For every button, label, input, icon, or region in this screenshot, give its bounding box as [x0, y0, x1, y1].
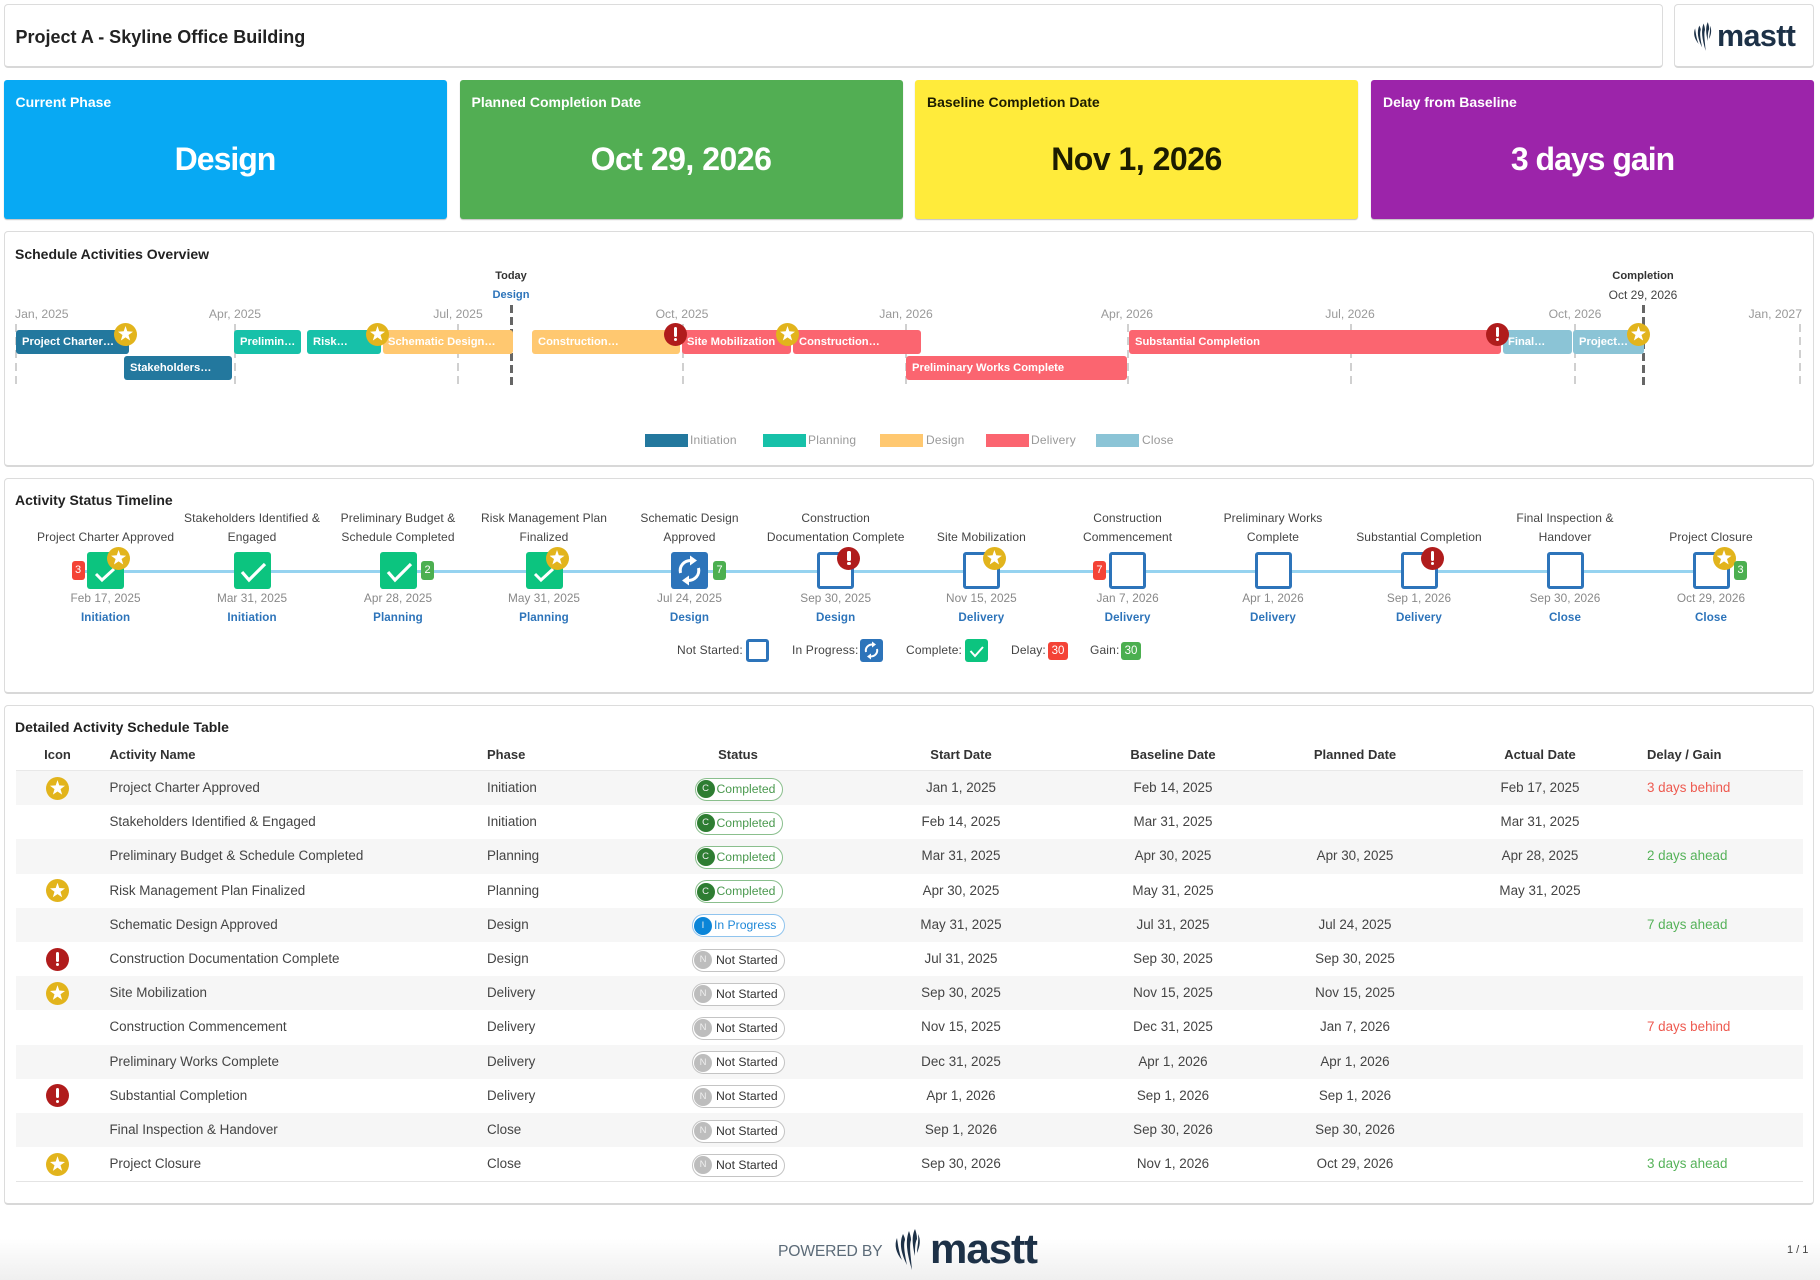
gantt axis labels: Jul, 2025 [433, 307, 483, 321]
row: project charter approved [16, 771, 1803, 805]
row: construction commencement: 7 days behind [1647, 1019, 1730, 1034]
icon: mastt logo [1694, 22, 1712, 51]
milestone: construction commencement [1083, 511, 1172, 624]
row: project closure: Nov 1, 2026 [1137, 1156, 1209, 1171]
footer background [0, 1225, 1820, 1280]
row: project closure: Close [487, 1156, 521, 1171]
row: schematic design: Schematic Design Approved [110, 917, 278, 932]
milestone: final inspection: Close [1549, 611, 1581, 624]
row: final inspection: Final Inspection & Handover [110, 1122, 278, 1137]
status legend: Not Started: [677, 643, 743, 657]
heading: Activity Status Timeline [15, 492, 173, 508]
row: project closure: Project Closure [110, 1156, 201, 1171]
milestone: risk management plan: Finalized [520, 530, 568, 544]
row: preliminary budget: Mar 31, 2025 [922, 848, 1000, 863]
table header: Activity Name [110, 747, 195, 762]
milestone: construction documentation: Sep 30, 2025 [800, 591, 871, 605]
row: site mobilization: Sep 30, 2025 [921, 985, 1001, 1000]
milestone: final inspection: Final Inspection & [1516, 511, 1614, 525]
milestone: substantial completion: Delivery [1396, 611, 1442, 624]
card: delay from baseline: Delay from Baseline [1383, 94, 1517, 110]
row: risk management plan [46, 879, 1581, 903]
milestone: construction commencement: Construction [1093, 511, 1162, 525]
gantt axis labels [15, 307, 1802, 321]
row: construction commencement [110, 1017, 1730, 1040]
row: substantial completion: Substantial Completion [110, 1088, 247, 1103]
row: construction documentation: Construction Documentation Complete [110, 951, 340, 966]
milestone: construction documentation: Documentation Complete [767, 530, 904, 544]
panel: logo [1674, 4, 1814, 68]
completion marker [1609, 270, 1677, 385]
row: project charter approved: Completed [716, 782, 775, 796]
bar: schematic design [383, 330, 513, 354]
row: stakeholders identified: Completed [716, 816, 775, 830]
row: final inspection [16, 1113, 1803, 1147]
bar: construction commencement [793, 330, 921, 354]
milestone: project charter approved: 3 [75, 564, 81, 576]
row: construction commencement: Nov 15, 2025 [921, 1019, 1001, 1034]
row: project closure: N [700, 1159, 706, 1170]
row: stakeholders identified: Mar 31, 2025 [1501, 814, 1579, 829]
milestone: final inspection [1516, 511, 1614, 624]
milestone: preliminary works complete: Delivery [1250, 611, 1296, 624]
panel: schedule activities overview [4, 231, 1814, 467]
milestone: construction commencement: Jan 7, 2026 [1096, 591, 1159, 605]
row: schematic design: I [702, 920, 704, 931]
page number: 1 / 1 [1787, 1244, 1808, 1256]
gantt axis labels: Jul, 2026 [1325, 307, 1375, 321]
milestone: schematic design approved: Jul 24, 2025 [657, 591, 722, 605]
bar: construction documentation: Construction… [538, 336, 619, 348]
footer: powered by mastt [778, 1225, 1038, 1272]
table header: Status [718, 747, 758, 762]
milestone: risk management plan: Planning [519, 611, 569, 624]
row: project charter approved: Initiation [487, 780, 537, 795]
row: site mobilization: Nov 15, 2025 [1133, 985, 1213, 1000]
row: preliminary budget: 2 days ahead [1647, 848, 1727, 863]
table header: Delay / Gain [1647, 747, 1721, 762]
row: construction commencement: Dec 31, 2025 [1133, 1019, 1213, 1034]
row: project charter approved: Project Charter Approved [110, 780, 260, 795]
bar: risk [307, 330, 381, 354]
row: construction documentation [46, 948, 1395, 972]
row: final inspection: Sep 30, 2026 [1133, 1122, 1213, 1137]
row: substantial completion: N [700, 1091, 706, 1102]
milestone: preliminary works complete: Complete [1247, 530, 1299, 544]
milestone: preliminary budget: Preliminary Budget & [341, 511, 455, 525]
row: substantial completion [46, 1084, 1391, 1108]
bar: site mobilization [682, 330, 791, 354]
milestone: site mobilization: Nov 15, 2025 [946, 591, 1017, 605]
row: final inspection: N [700, 1125, 706, 1136]
status legend [677, 639, 1141, 662]
milestone: preliminary budget: Apr 28, 2025 [364, 591, 432, 605]
milestone: schematic design approved: 7 [716, 564, 723, 576]
powered by label: POWERED BY [778, 1243, 882, 1260]
bar: stakeholders [124, 356, 232, 380]
row: stakeholders identified: Initiation [487, 814, 537, 829]
milestone: site mobilization [937, 530, 1026, 624]
gantt axis labels: Oct, 2026 [1549, 307, 1601, 321]
milestone: construction documentation [767, 511, 904, 624]
row: construction documentation: Jul 31, 2025 [925, 951, 997, 966]
heading: Schedule Activities Overview [15, 246, 209, 262]
milestone: project closure [1669, 530, 1753, 624]
milestone: project charter approved: Project Charter Approved [37, 530, 174, 544]
row: preliminary budget: Completed [716, 850, 775, 864]
status legend: Gain: [1090, 643, 1119, 657]
milestone: preliminary budget: Planning [373, 611, 423, 624]
row: preliminary works: Not Started [716, 1055, 778, 1069]
status legend: Delay: [1011, 643, 1046, 657]
milestone: project charter approved: Feb 17, 2025 [71, 591, 141, 605]
row: construction commencement: N [700, 1022, 706, 1033]
row: site mobilization: Site Mobilization [110, 985, 207, 1000]
row: schematic design: May 31, 2025 [920, 917, 1002, 932]
milestone: preliminary budget: 2 [424, 564, 431, 576]
row: substantial completion: Sep 1, 2026 [1137, 1088, 1209, 1103]
card: baseline completion date: Nov 1, 2026 [1051, 141, 1222, 177]
milestone: preliminary works complete: Apr 1, 2026 [1242, 591, 1304, 605]
row: construction documentation: Sep 30, 2025 [1133, 951, 1213, 966]
bar: final inspection [1503, 330, 1572, 354]
row: risk management plan: Planning [487, 883, 539, 898]
icon: star [776, 322, 799, 346]
milestone: risk management plan: Risk Management Plan [481, 511, 607, 525]
row: project charter approved: Feb 14, 2025 [1134, 780, 1212, 795]
status legend: Complete: [906, 643, 962, 657]
panel: detailed activity schedule table [4, 705, 1814, 1205]
row: preliminary works: Dec 31, 2025 [921, 1054, 1001, 1069]
row: preliminary budget: Planning [487, 848, 539, 863]
gantt axis labels: Jan, 2025 [15, 307, 69, 321]
gantt axis labels: Apr, 2026 [1101, 307, 1153, 321]
row: site mobilization: Delivery [487, 985, 535, 1000]
milestone: final inspection: Handover [1539, 530, 1591, 544]
row: construction commencement: Jan 7, 2026 [1320, 1019, 1390, 1034]
row: preliminary budget: Apr 30, 2025 [1317, 848, 1393, 863]
bar: preliminary budget [234, 330, 301, 354]
row: schematic design: Jul 24, 2025 [1319, 917, 1391, 932]
panel: activity status timeline [4, 478, 1814, 694]
milestone: schematic design approved: Schematic Design [640, 511, 739, 525]
row: project closure: Oct 29, 2026 [1317, 1156, 1393, 1171]
bar: site mobilization: Site Mobilization [687, 336, 775, 348]
today marker [492, 270, 530, 385]
logo wordmark: mastt [930, 1225, 1037, 1272]
row: schematic design: Design [487, 917, 529, 932]
icon: alert [1486, 322, 1508, 346]
bar: project charter [16, 330, 129, 354]
milestone: preliminary budget: Schedule Completed [341, 530, 455, 544]
bar: construction documentation [532, 330, 680, 354]
today marker: Design [492, 289, 530, 301]
card: current phase: Current Phase [16, 94, 111, 110]
card: baseline completion date [915, 80, 1358, 219]
row: preliminary works: Apr 1, 2026 [1138, 1054, 1208, 1069]
row: schematic design [16, 908, 1803, 942]
row: project charter approved: C [702, 783, 709, 794]
milestone: preliminary budget [341, 511, 456, 624]
row: preliminary budget: Preliminary Budget & Schedule Completed [110, 848, 363, 863]
row: risk management plan: Completed [716, 884, 775, 898]
table header: Start Date [930, 747, 992, 762]
row: substantial completion: Not Started [716, 1089, 778, 1103]
row: substantial completion: Apr 1, 2026 [926, 1088, 996, 1103]
row: construction documentation: Not Started [716, 952, 778, 966]
bar: construction commencement: Construction… [799, 336, 880, 348]
milestone: site mobilization: Delivery [958, 611, 1004, 624]
status legend: 30 [1052, 645, 1064, 657]
bar: risk: Risk… [313, 336, 348, 348]
gantt axis labels: Jan, 2026 [879, 307, 933, 321]
heading: Detailed Activity Schedule Table [15, 719, 229, 735]
header: project title panel [4, 4, 1663, 68]
icon: star [1627, 322, 1650, 346]
bar: project charter: Project Charter… [22, 336, 114, 348]
bar: final inspection: Final… [1508, 336, 1545, 348]
gantt axis labels: Apr, 2025 [209, 307, 261, 321]
row: construction commencement: Construction Commencement [110, 1019, 287, 1034]
row: stakeholders identified: Stakeholders Identified & Engaged [110, 814, 316, 829]
milestone: site mobilization: Site Mobilization [937, 530, 1026, 544]
milestone: preliminary works complete [1224, 511, 1322, 624]
milestone: substantial completion [1356, 530, 1482, 624]
bar: preliminary works complete: Preliminary Works Complete [912, 362, 1064, 374]
row: preliminary budget [16, 839, 1803, 874]
gantt axis labels: Oct, 2025 [656, 307, 708, 321]
row: risk management plan: C [702, 886, 709, 897]
row: project closure: Not Started [716, 1158, 778, 1172]
row: preliminary works: Apr 1, 2026 [1320, 1054, 1390, 1069]
row: final inspection: Sep 1, 2026 [925, 1122, 997, 1137]
row: schematic design: Jul 31, 2025 [1137, 917, 1209, 932]
row: project charter approved: Feb 17, 2025 [1501, 780, 1579, 795]
milestone: project charter approved: Initiation [81, 611, 130, 624]
milestone: stakeholders identified: Engaged [228, 530, 276, 544]
row: preliminary works: N [700, 1057, 706, 1068]
legend: Initiation [690, 433, 737, 447]
row: stakeholders identified [110, 812, 1579, 835]
table header: Planned Date [1314, 747, 1396, 762]
row: preliminary budget: Apr 28, 2025 [1502, 848, 1578, 863]
table header: Actual Date [1504, 747, 1576, 762]
milestone: substantial completion: Substantial Completion [1356, 530, 1482, 544]
card: current phase [4, 80, 446, 219]
logo wordmark: mastt [1717, 19, 1795, 53]
bar: preliminary budget: Prelimin… [240, 336, 295, 348]
row: construction commencement: Delivery [487, 1019, 535, 1034]
bar: substantial completion: Substantial Completion [1135, 336, 1260, 348]
card: planned completion date: Oct 29, 2026 [591, 141, 771, 177]
milestone: preliminary works complete: Preliminary Works [1224, 511, 1322, 525]
completion marker: Completion [1612, 270, 1674, 282]
milestone: project closure: Close [1695, 611, 1727, 624]
row: risk management plan: May 31, 2025 [1499, 883, 1581, 898]
row: construction documentation: Design [487, 951, 529, 966]
row: final inspection: Sep 30, 2026 [1315, 1122, 1395, 1137]
bar: preliminary works complete [906, 356, 1127, 380]
row: preliminary works: Delivery [487, 1054, 535, 1069]
legend: Close [1142, 433, 1174, 447]
row: site mobilization: Not Started [716, 987, 778, 1001]
timeline line [84, 570, 1711, 572]
icon: star [114, 322, 137, 346]
row: schematic design: In Progress [714, 918, 776, 932]
row: final inspection: Not Started [716, 1124, 778, 1138]
title: Project A - Skyline Office Building [16, 27, 305, 47]
milestone: stakeholders identified: Mar 31, 2025 [217, 591, 287, 605]
row: construction documentation: N [700, 954, 706, 965]
row: preliminary budget: C [702, 851, 709, 862]
legend: Planning [808, 433, 856, 447]
milestone: schematic design approved [640, 511, 739, 624]
card: planned completion date: Planned Completion Date [472, 94, 641, 110]
card: planned completion date [460, 80, 902, 219]
row: schematic design: 7 days ahead [1647, 917, 1727, 932]
icon: star [366, 322, 389, 346]
table header: Baseline Date [1130, 747, 1216, 762]
row: risk management plan: Apr 30, 2025 [923, 883, 999, 898]
milestone: schematic design approved: Design [670, 611, 709, 624]
table header: Phase [487, 747, 525, 762]
row: construction commencement: Not Started [716, 1021, 778, 1035]
row: substantial completion: Delivery [487, 1088, 535, 1103]
milestone: risk management plan [481, 511, 607, 624]
bar: project closure: Project… [1579, 336, 1628, 348]
row: site mobilization: N [700, 988, 706, 999]
milestone: schematic design approved: Approved [663, 530, 716, 544]
milestone: construction documentation: Construction [801, 511, 870, 525]
completion marker: Oct 29, 2026 [1609, 288, 1677, 302]
row: preliminary budget: Apr 30, 2025 [1135, 848, 1211, 863]
row: preliminary works: Preliminary Works Complete [110, 1054, 279, 1069]
milestone: construction commencement: 7 [1096, 564, 1103, 576]
milestone: substantial completion: Sep 1, 2026 [1387, 591, 1451, 605]
milestone: project charter approved [37, 530, 174, 624]
row: project closure [16, 1153, 1803, 1182]
milestone: risk management plan: May 31, 2025 [508, 591, 580, 605]
row: stakeholders identified: Feb 14, 2025 [922, 814, 1000, 829]
row: final inspection: Close [487, 1122, 521, 1137]
milestone: stakeholders identified: Stakeholders Identified & [184, 511, 320, 525]
row: risk management plan: May 31, 2025 [1132, 883, 1214, 898]
row: project charter approved: 3 days behind [1647, 780, 1730, 795]
icon: mastt logo [896, 1229, 920, 1270]
bar: substantial completion [1129, 330, 1501, 354]
today marker: Today [495, 270, 527, 282]
bar: schematic design: Schematic Design… [388, 336, 496, 348]
row: stakeholders identified: Mar 31, 2025 [1134, 814, 1212, 829]
row: project closure: Sep 30, 2026 [921, 1156, 1001, 1171]
row: preliminary works [16, 1045, 1803, 1079]
row: stakeholders identified: C [702, 817, 709, 828]
bar: project closure [1573, 330, 1644, 354]
row: project closure: 3 days ahead [1647, 1156, 1727, 1171]
milestone: final inspection: Sep 30, 2026 [1530, 591, 1600, 605]
icon: alert [664, 322, 687, 346]
status legend: In Progress: [792, 643, 858, 657]
milestone: construction commencement: Delivery [1105, 611, 1151, 624]
milestone: project closure: 3 [1737, 564, 1744, 576]
milestone: stakeholders identified [184, 511, 320, 624]
table header: Icon [44, 747, 71, 762]
legend: Design [926, 433, 965, 447]
milestone: construction commencement: Commencement [1083, 530, 1172, 544]
card: baseline completion date: Baseline Completion Date [927, 94, 1100, 110]
milestone: stakeholders identified: Initiation [227, 611, 277, 624]
milestone: project closure: Oct 29, 2026 [1677, 591, 1745, 605]
card: delay from baseline [1371, 80, 1814, 219]
gantt axis labels: Jan, 2027 [1748, 307, 1802, 321]
milestone: project closure: Project Closure [1669, 530, 1753, 544]
card: delay from baseline: 3 days gain [1511, 141, 1674, 177]
legend: Delivery [1031, 433, 1076, 447]
table header [16, 746, 1803, 771]
milestone: construction documentation: Design [816, 611, 855, 624]
card: current phase: Design [175, 141, 275, 177]
legend [645, 433, 1174, 447]
row: construction documentation: Sep 30, 2025 [1315, 951, 1395, 966]
bar: stakeholders: Stakeholders… [130, 362, 211, 374]
row: risk management plan: Risk Management Plan Finalized [110, 883, 305, 898]
row: substantial completion: Sep 1, 2026 [1319, 1088, 1391, 1103]
row: site mobilization: Nov 15, 2025 [1315, 985, 1395, 1000]
status legend: 30 [1125, 645, 1137, 657]
row: project charter approved: Jan 1, 2025 [926, 780, 996, 795]
row: site mobilization [16, 976, 1803, 1010]
